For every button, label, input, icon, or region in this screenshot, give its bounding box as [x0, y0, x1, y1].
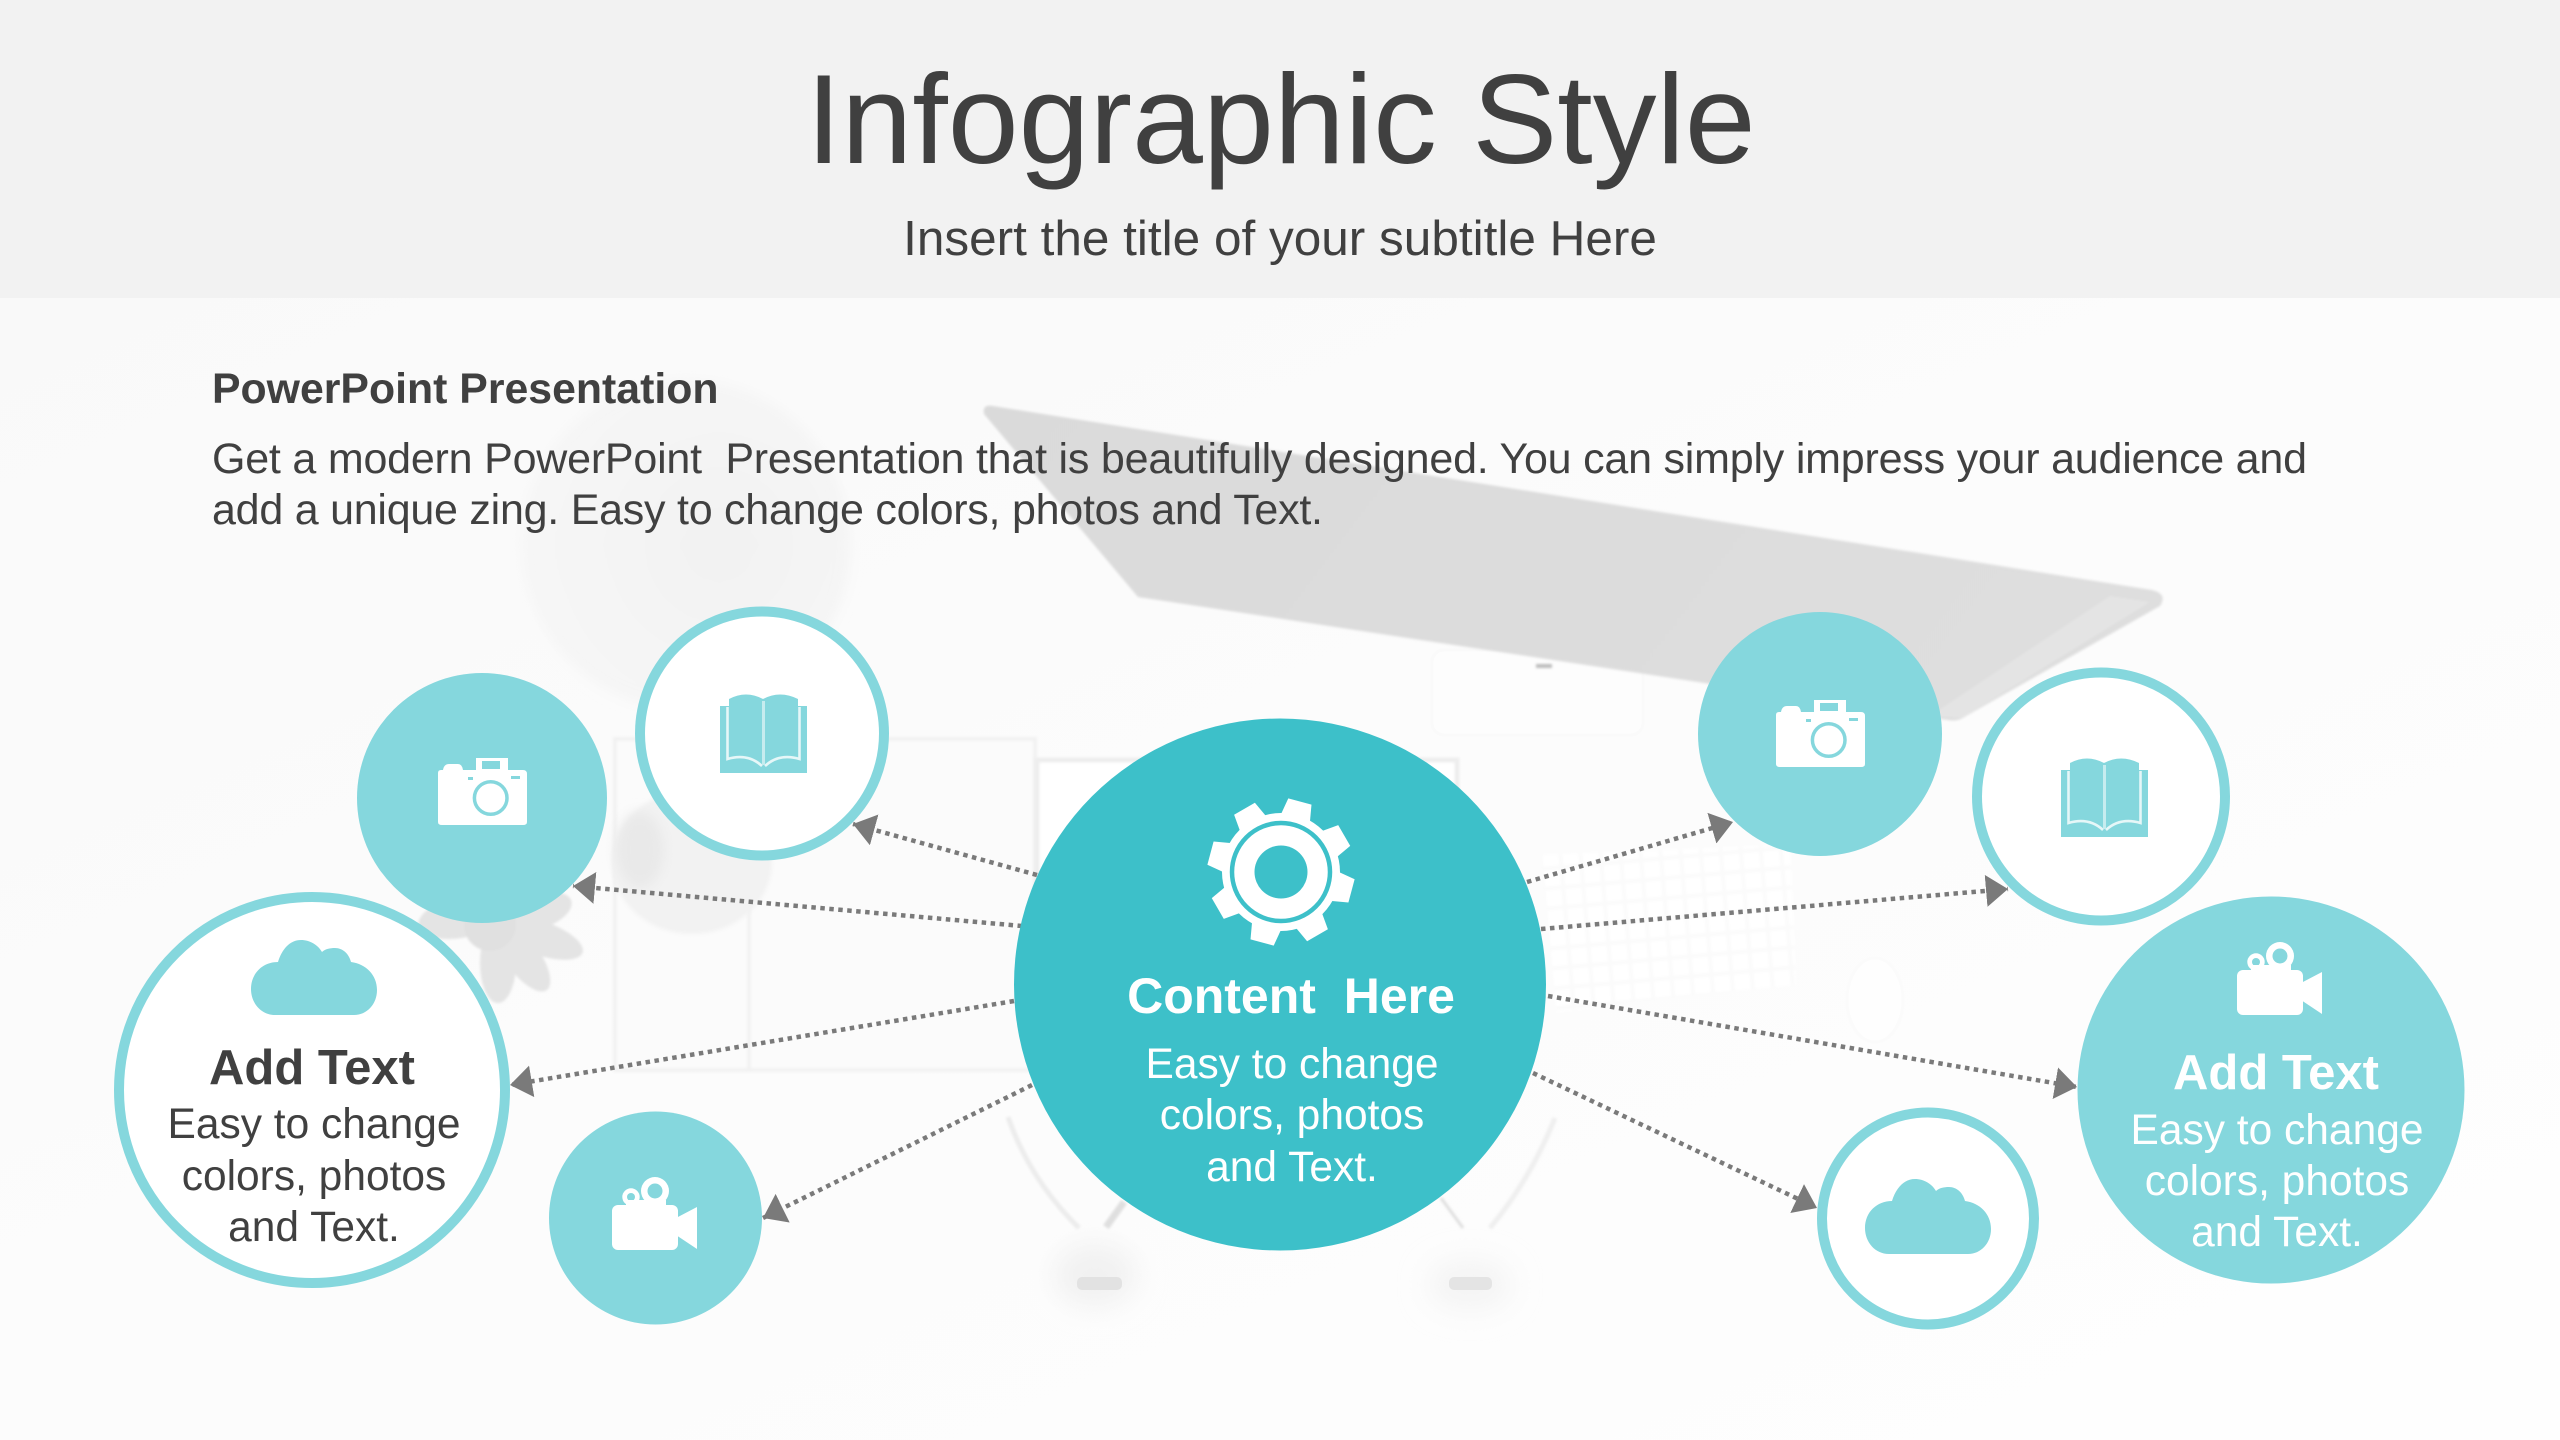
- satellite: left book: [640, 612, 884, 856]
- icon: book: [720, 694, 807, 773]
- notebook: [615, 739, 1035, 1070]
- right circle body: and Text.: [2191, 1209, 2363, 1256]
- arrow to right book: [1541, 889, 2008, 929]
- arrow to right camera: [1527, 822, 1733, 882]
- satellite: right book: [1977, 672, 2225, 920]
- icon: cloud: [1865, 1179, 1991, 1254]
- monitor: [984, 406, 2163, 720]
- satellite: right camera: [1698, 612, 1942, 856]
- desk lamp: [521, 380, 851, 710]
- centre circle: [1014, 718, 1546, 1250]
- mouse: [1847, 958, 1903, 1042]
- plant pot: [612, 790, 772, 934]
- intro body: Get a modern PowerPoint Presentation that is beautifully designed. You can simply impress your audience and: [212, 435, 2307, 483]
- arrow to left video: [763, 1085, 1032, 1218]
- arrow to left book: [853, 824, 1037, 875]
- satellite: right text circle: [2078, 896, 2464, 1284]
- paper sheet: [1037, 760, 1457, 1060]
- centre body: colors, photos: [1160, 1092, 1424, 1139]
- right circle heading: Add Text: [2173, 1046, 2379, 1100]
- icon: book: [2061, 758, 2148, 837]
- icon: camera: [1776, 700, 1865, 767]
- arrow to right text circle: [1548, 996, 2077, 1087]
- arrow to left camera: [573, 886, 1022, 926]
- title: Infographic Style: [806, 49, 1756, 191]
- centre body: Easy to change: [1146, 1041, 1438, 1088]
- text block: intro: [212, 365, 2307, 534]
- header band: [0, 0, 2560, 298]
- plant: [415, 884, 588, 1003]
- icon: cloud: [251, 940, 377, 1015]
- arrows from centre to satellites: [510, 822, 2077, 1218]
- subtitle: Insert the title of your subtitle Here: [903, 211, 1657, 266]
- satellite: right cloud: [1822, 1112, 2034, 1324]
- icon: gear: [1206, 797, 1356, 947]
- keyboard: [1540, 845, 1796, 1012]
- satellite: left video: [549, 1112, 762, 1324]
- centre heading: Content Here: [1127, 968, 1455, 1024]
- satellite: left text circle: [119, 897, 505, 1283]
- right circle body: colors, photos: [2145, 1158, 2409, 1205]
- left circle body: colors, photos: [182, 1153, 446, 1200]
- left circle heading: Add Text: [209, 1041, 415, 1095]
- arrow to right cloud: [1533, 1073, 1817, 1208]
- left circle body: and Text.: [228, 1204, 400, 1251]
- intro body: add a unique zing. Easy to change colors, photos and Text.: [212, 486, 1323, 534]
- left circle body: Easy to change: [168, 1101, 460, 1148]
- chair: [1008, 1117, 1555, 1311]
- arrow to left text circle: [510, 1001, 1014, 1085]
- monitor stand: [1432, 650, 1643, 735]
- icon: camera: [438, 758, 527, 825]
- right circle body: Easy to change: [2131, 1107, 2423, 1154]
- icon: video camera: [612, 1177, 697, 1250]
- satellite: left camera: [357, 673, 607, 923]
- icon: video camera: [2237, 942, 2322, 1015]
- intro heading: PowerPoint Presentation: [212, 365, 719, 413]
- background photo: [0, 298, 2560, 1440]
- centre body: and Text.: [1206, 1144, 1378, 1191]
